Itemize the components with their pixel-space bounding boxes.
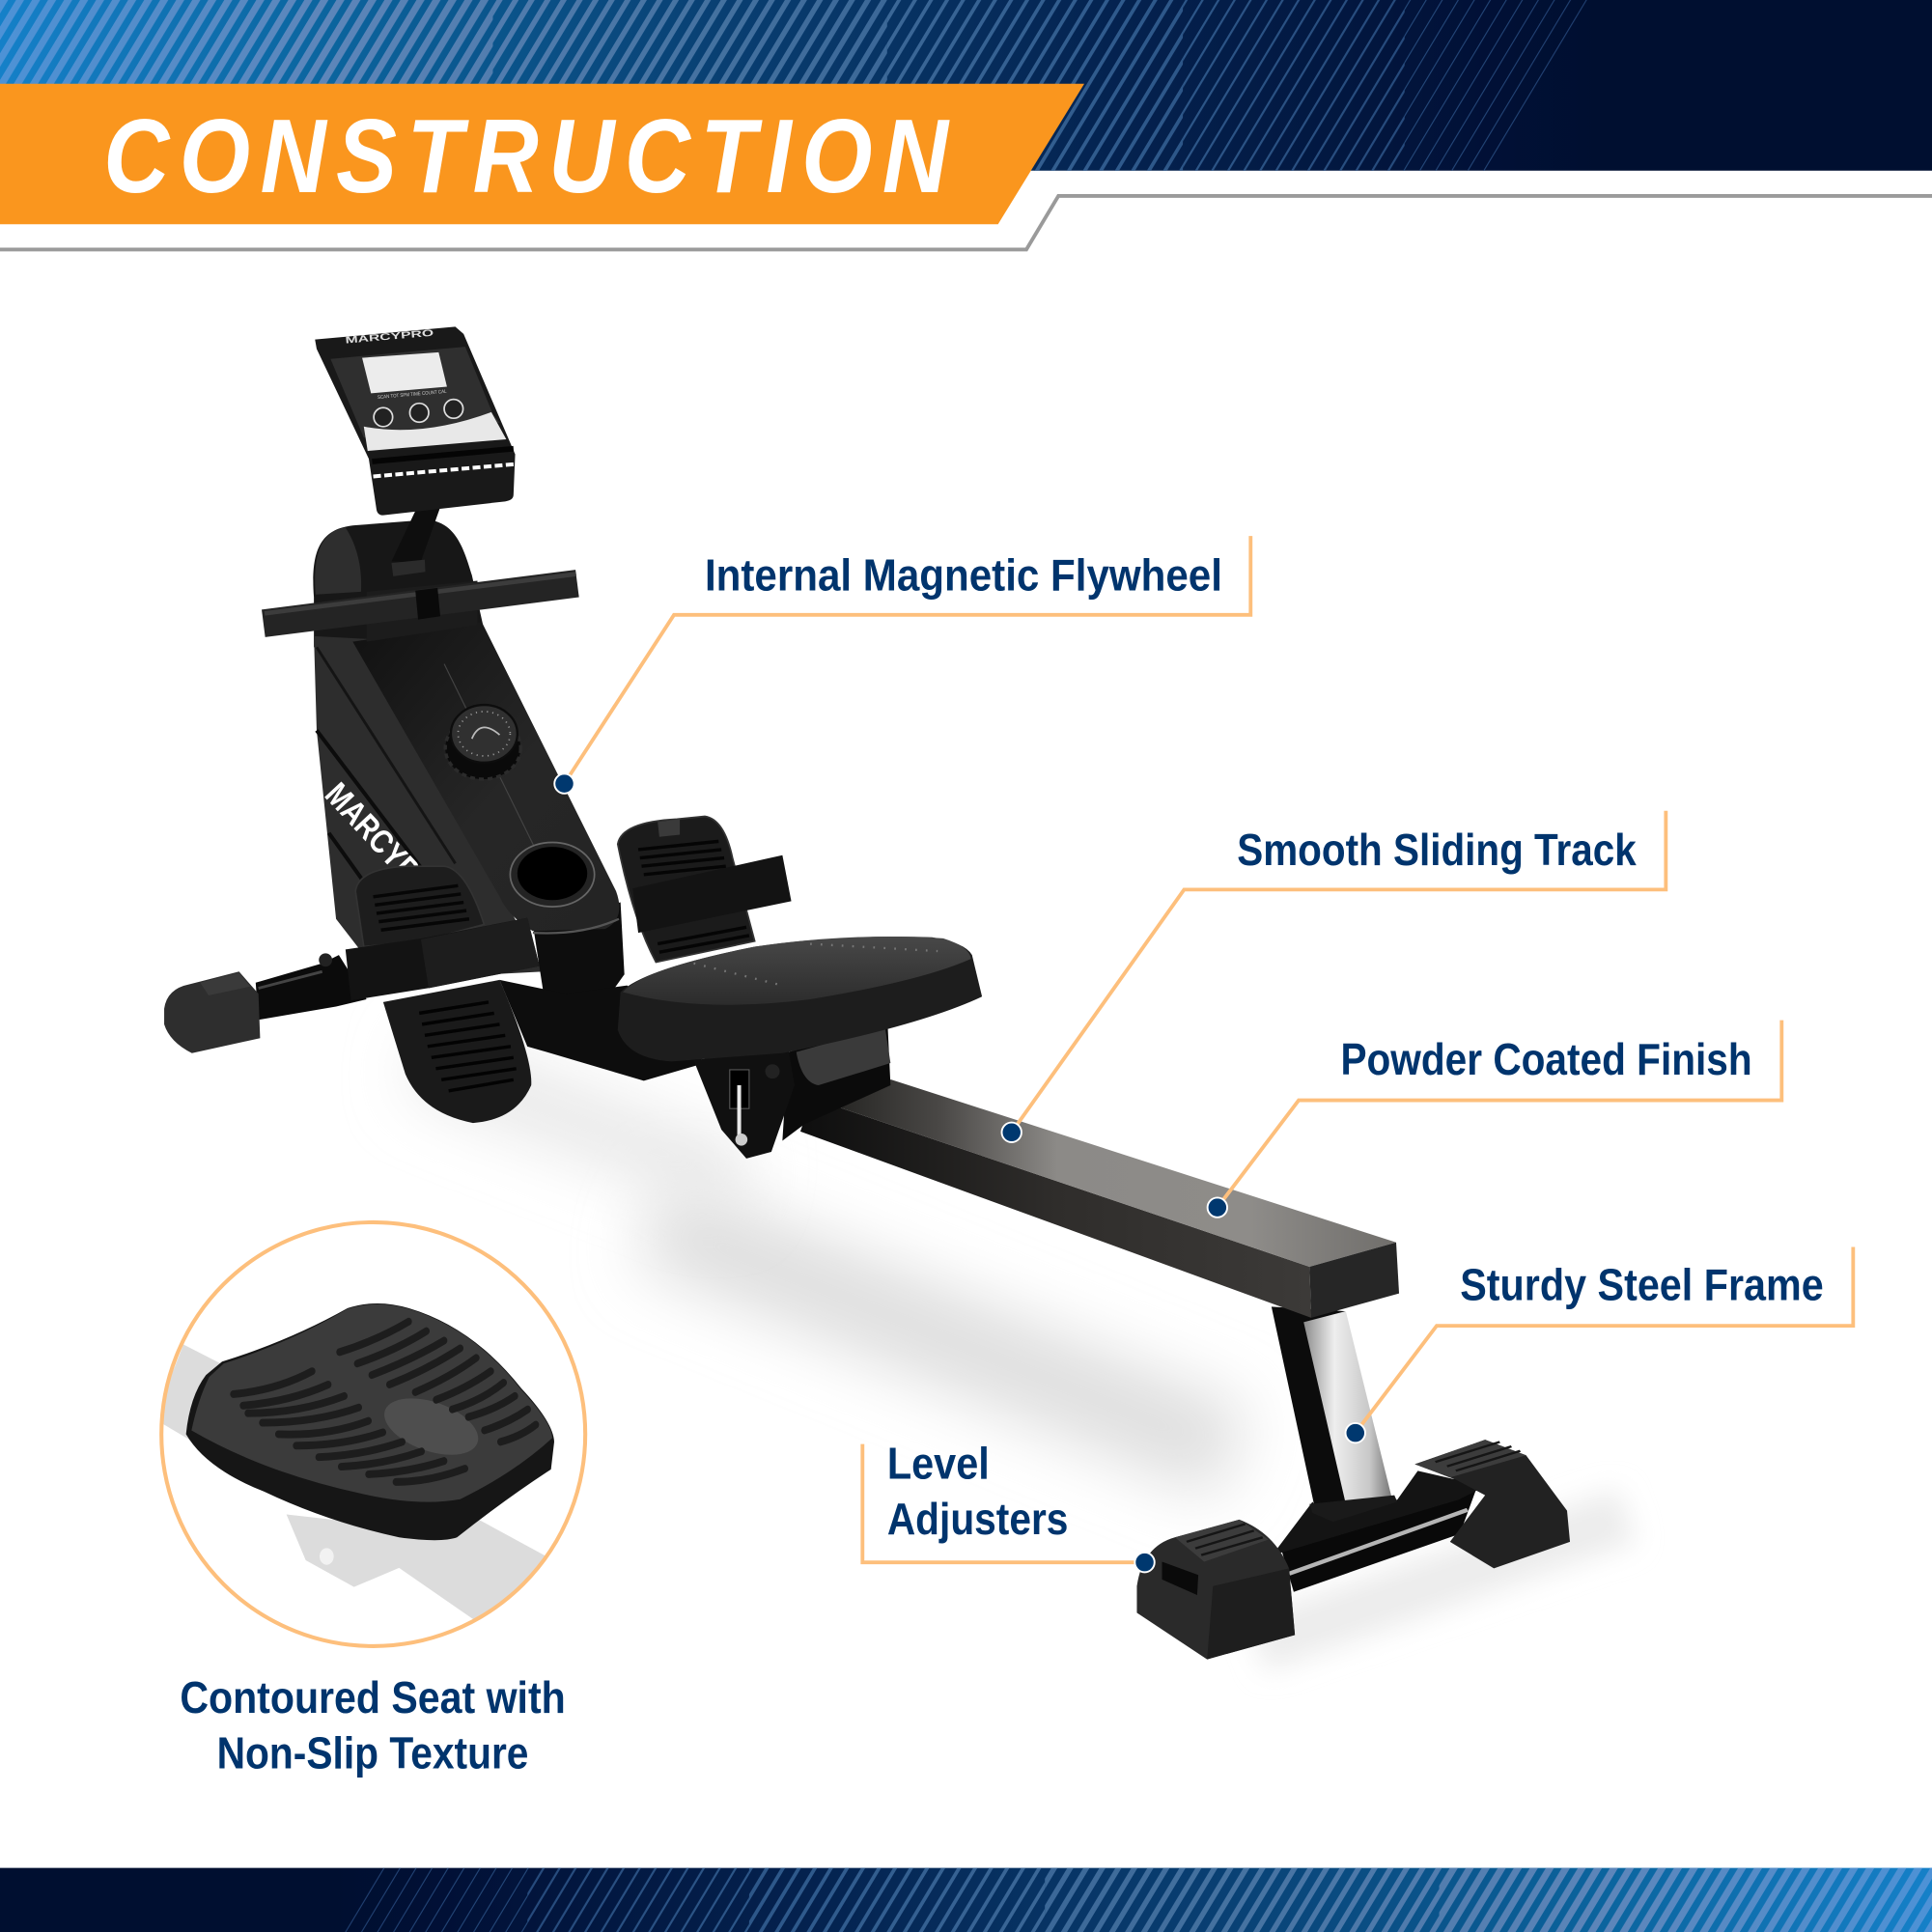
label: Sturdy Steel Frame xyxy=(1460,1259,1824,1309)
top plate xyxy=(352,623,619,934)
resistance knob xyxy=(445,705,520,779)
callout: sturdy steel frame xyxy=(1346,1246,1853,1442)
circle outline xyxy=(161,1222,585,1646)
rail side face xyxy=(800,1098,1311,1318)
footer band xyxy=(0,1867,1932,1932)
callout: powder coated finish xyxy=(1208,1021,1781,1218)
right foot xyxy=(1414,1440,1570,1568)
level adjuster xyxy=(1162,1562,1198,1595)
label: Smooth Sliding Track xyxy=(1237,825,1637,875)
LCD screen xyxy=(362,352,447,393)
marker xyxy=(1134,1553,1155,1572)
floor shadow xyxy=(419,1059,1627,1645)
callout: level adjusters: Adjusters xyxy=(887,1494,1068,1544)
callout: internal magnetic flywheel xyxy=(554,536,1250,794)
console buttons xyxy=(374,400,463,427)
label: Level xyxy=(887,1438,990,1488)
callout: smooth sliding track xyxy=(1002,811,1666,1142)
marker xyxy=(1346,1423,1365,1442)
callout: level adjusters xyxy=(862,1438,1155,1572)
housing brand text: MARCYPRO xyxy=(318,776,454,919)
console readout labels: SCAN TOT SPM TIME COUNT CAL xyxy=(378,389,447,401)
upright leg xyxy=(1272,1306,1397,1522)
ghosted rail behind seat xyxy=(154,1344,553,1621)
console strip xyxy=(364,412,506,451)
side housing xyxy=(314,636,544,980)
near foot pedal xyxy=(346,866,540,1123)
rowing machine illustration xyxy=(164,326,1570,1660)
title: CONSTRUCTION xyxy=(103,98,950,215)
panel: seat close-up xyxy=(154,1222,585,1778)
brand on console: MARCYPRO xyxy=(345,328,434,347)
cup holder xyxy=(510,843,595,907)
handlebar xyxy=(264,574,577,642)
marker xyxy=(554,773,574,794)
header band xyxy=(0,0,1932,173)
console xyxy=(315,326,516,516)
seat ribs xyxy=(234,1322,536,1482)
rail end cap xyxy=(1309,1243,1399,1318)
header underline rule xyxy=(0,196,1932,249)
seat top surface xyxy=(623,937,971,1005)
flywheel housing dome xyxy=(313,519,483,647)
rear section of machine xyxy=(164,326,792,1123)
slide rail and front stabilizer xyxy=(800,1079,1570,1660)
seat caption: Contoured Seat with xyxy=(180,1672,566,1722)
center frame xyxy=(499,980,705,1080)
base under top plate xyxy=(533,903,625,996)
left foot xyxy=(1136,1520,1295,1660)
label: Powder Coated Finish xyxy=(1340,1034,1752,1084)
front stabilizer tube xyxy=(1277,1467,1485,1592)
console arm xyxy=(391,509,439,576)
seat body xyxy=(618,937,982,1061)
contoured seat xyxy=(186,1303,554,1540)
marker xyxy=(1208,1197,1227,1218)
carriage xyxy=(693,1027,890,1159)
panel: seat close-up: Non-Slip Texture xyxy=(217,1727,528,1778)
title banner xyxy=(0,84,1084,224)
rail top face xyxy=(812,1079,1396,1267)
far foot pedal xyxy=(618,817,792,963)
rear stabilizer xyxy=(164,953,367,1053)
marker xyxy=(1002,1123,1022,1142)
label: Internal Magnetic Flywheel xyxy=(705,549,1222,600)
seat and carriage xyxy=(618,937,982,1159)
